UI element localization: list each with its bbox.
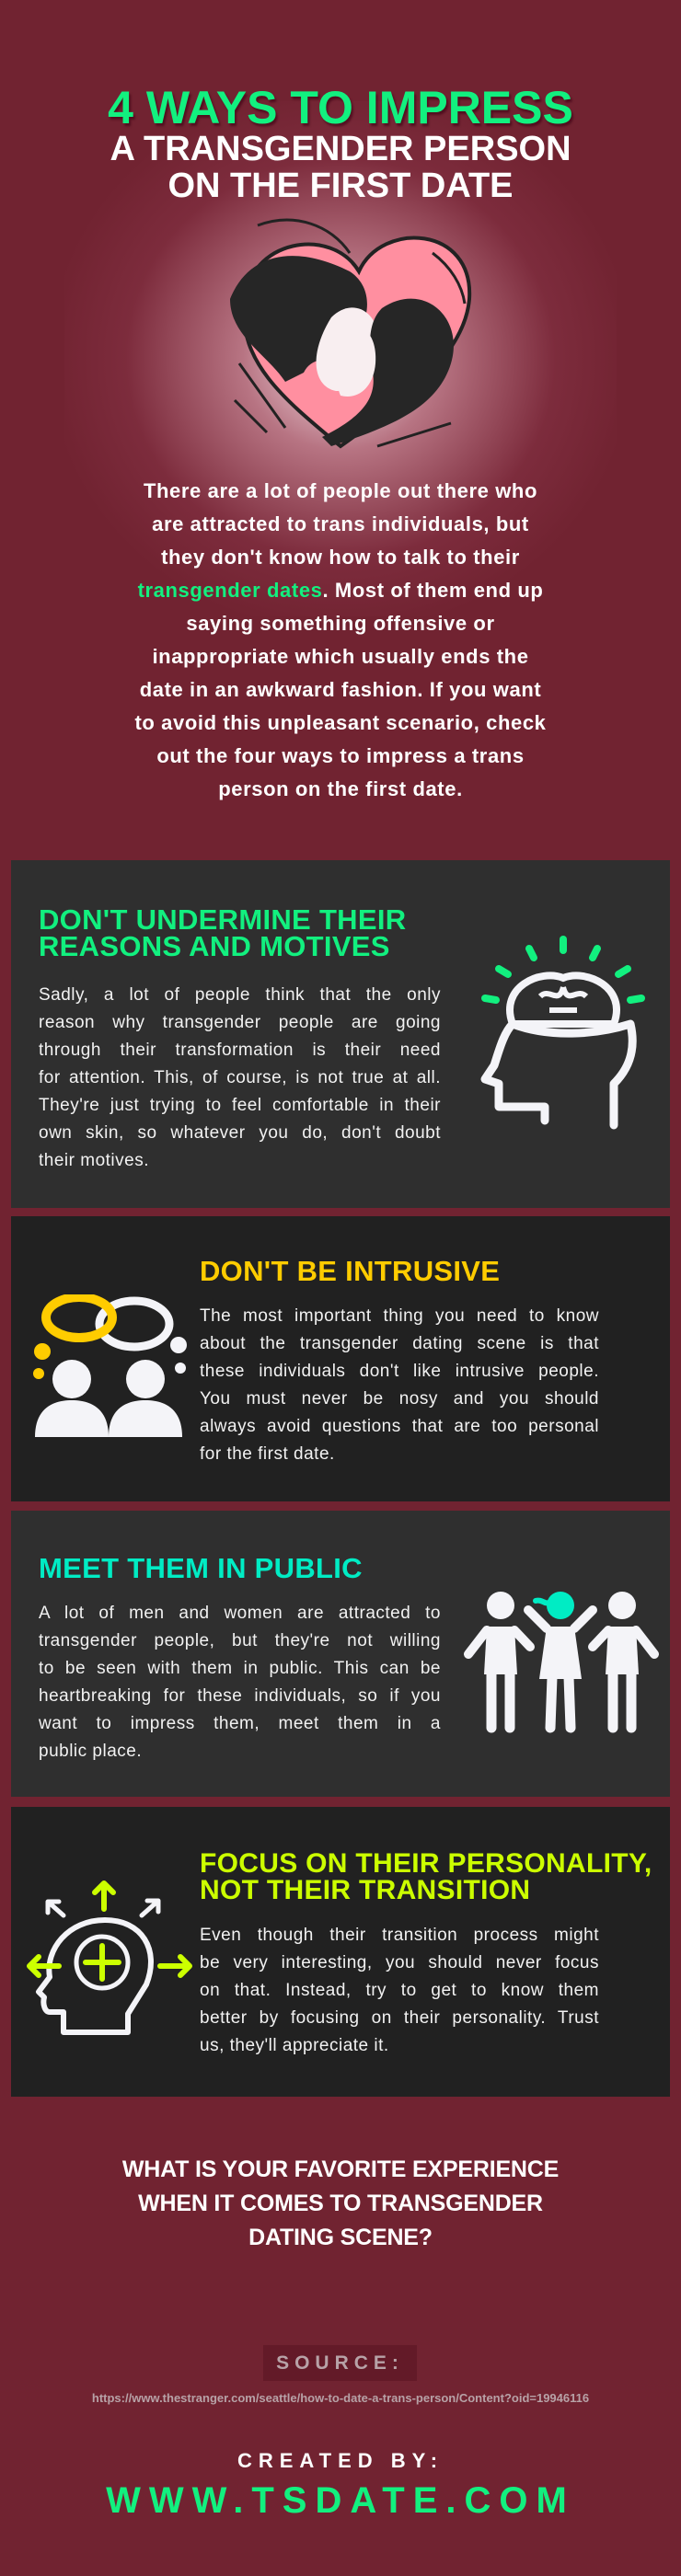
intro paragraph: they don't know how to talk to their — [161, 546, 520, 569]
source label — [263, 2345, 417, 2381]
intro paragraph — [134, 479, 547, 800]
title: A TRANSGENDER PERSON — [110, 130, 571, 168]
heading: NOT THEIR TRANSITION — [200, 1875, 530, 1905]
text block: heartbreaking for these individuals, so if you — [39, 1686, 441, 1706]
icon: head with brain — [480, 936, 645, 1130]
text block: Even though their transition process might — [200, 1926, 599, 1945]
heading: FOCUS ON THEIR PERSONALITY, — [200, 1848, 652, 1879]
intro paragraph: There are a lot of people out there who — [144, 479, 537, 502]
text block: these individuals don't like intrusive people. — [200, 1362, 599, 1381]
source url: https://www.thestranger.com/seattle/how-to-date-a-trans-person/Content?oid=19946116 — [92, 2391, 589, 2405]
title: ON THE FIRST DATE — [167, 167, 514, 205]
panel: don't be intrusive — [11, 1216, 670, 1501]
created by: CREATED BY: — [237, 2449, 444, 2472]
intro paragraph: saying something offensive or — [186, 612, 495, 635]
text block: through their transformation is their need — [39, 1041, 441, 1060]
text block: want to impress them, meet them in a — [39, 1714, 441, 1733]
text block: Sadly, a lot of people think that the only — [39, 985, 441, 1005]
panel: focus on personality — [11, 1807, 670, 2097]
heading — [200, 1848, 652, 1905]
intro paragraph: transgender dates. Most of them end up — [138, 579, 543, 602]
text block: better by focusing on their personality. Trust — [200, 2008, 599, 2028]
text block: The most important thing you need to know — [200, 1306, 599, 1326]
text block — [200, 1926, 599, 2055]
text block: to be seen with them in public. This can be — [39, 1659, 441, 1678]
question text: WHAT IS YOUR FAVORITE EXPERIENCE — [122, 2156, 559, 2182]
text block: for attention. This, of course, is not true at all. — [39, 1068, 441, 1087]
illustration: kissing couple in heart — [230, 219, 471, 449]
panel: don't undermine — [11, 860, 670, 1208]
source label: SOURCE: — [276, 2352, 404, 2374]
heading: DON'T BE INTRUSIVE — [200, 1255, 500, 1287]
text block: for the first date. — [200, 1444, 335, 1464]
intro paragraph: person on the first date. — [218, 777, 463, 800]
text block: reason why transgender people are going — [39, 1013, 441, 1032]
icon: two people thinking — [33, 1294, 187, 1437]
heading: MEET THEM IN PUBLIC — [39, 1552, 363, 1584]
icon: head with plus and arrows — [27, 1880, 192, 2035]
text block: their motives. — [39, 1151, 149, 1170]
text block: about the transgender dating scene is that — [200, 1334, 599, 1353]
intro paragraph: out the four ways to impress a trans — [156, 744, 525, 767]
icon: three people — [464, 1592, 659, 1733]
text block: You must never be nosy and you should — [200, 1389, 599, 1409]
text block — [39, 1604, 441, 1761]
title: 4 WAYS TO IMPRESS — [108, 82, 573, 133]
title — [108, 82, 574, 205]
text block: us, they'll appreciate it. — [200, 2036, 389, 2055]
text block: on that. Instead, try to get to know them — [200, 1981, 599, 2000]
intro paragraph: to avoid this unpleasant scenario, check — [134, 711, 547, 734]
question text: WHEN IT COMES TO TRANSGENDER — [138, 2191, 543, 2216]
text block: own skin, so whatever you do, don't doubt — [39, 1123, 441, 1143]
question text: DATING SCENE? — [248, 2225, 433, 2250]
panel: meet them in public — [11, 1511, 670, 1797]
intro paragraph: are attracted to trans individuals, but — [152, 512, 529, 535]
heading: REASONS AND MOTIVES — [39, 930, 390, 962]
text block — [39, 985, 441, 1170]
text block: A lot of men and women are attracted to — [39, 1604, 441, 1623]
heading — [39, 903, 406, 962]
text block: transgender people, but they're not willing — [39, 1631, 441, 1650]
text block: public place. — [39, 1742, 142, 1761]
intro paragraph: inappropriate which usually ends the — [152, 645, 529, 668]
text block: They're just trying to feel comfortable in their — [39, 1096, 441, 1115]
text block — [200, 1306, 599, 1464]
text block: be very interesting, you should never focus — [200, 1953, 599, 1972]
heading: DON'T UNDERMINE THEIR — [39, 903, 406, 936]
intro paragraph: date in an awkward fashion. If you want — [140, 678, 541, 701]
text block: always avoid questions that are too personal — [200, 1417, 599, 1436]
website: WWW.TSDATE.COM — [106, 2480, 575, 2521]
question text — [121, 2156, 559, 2250]
